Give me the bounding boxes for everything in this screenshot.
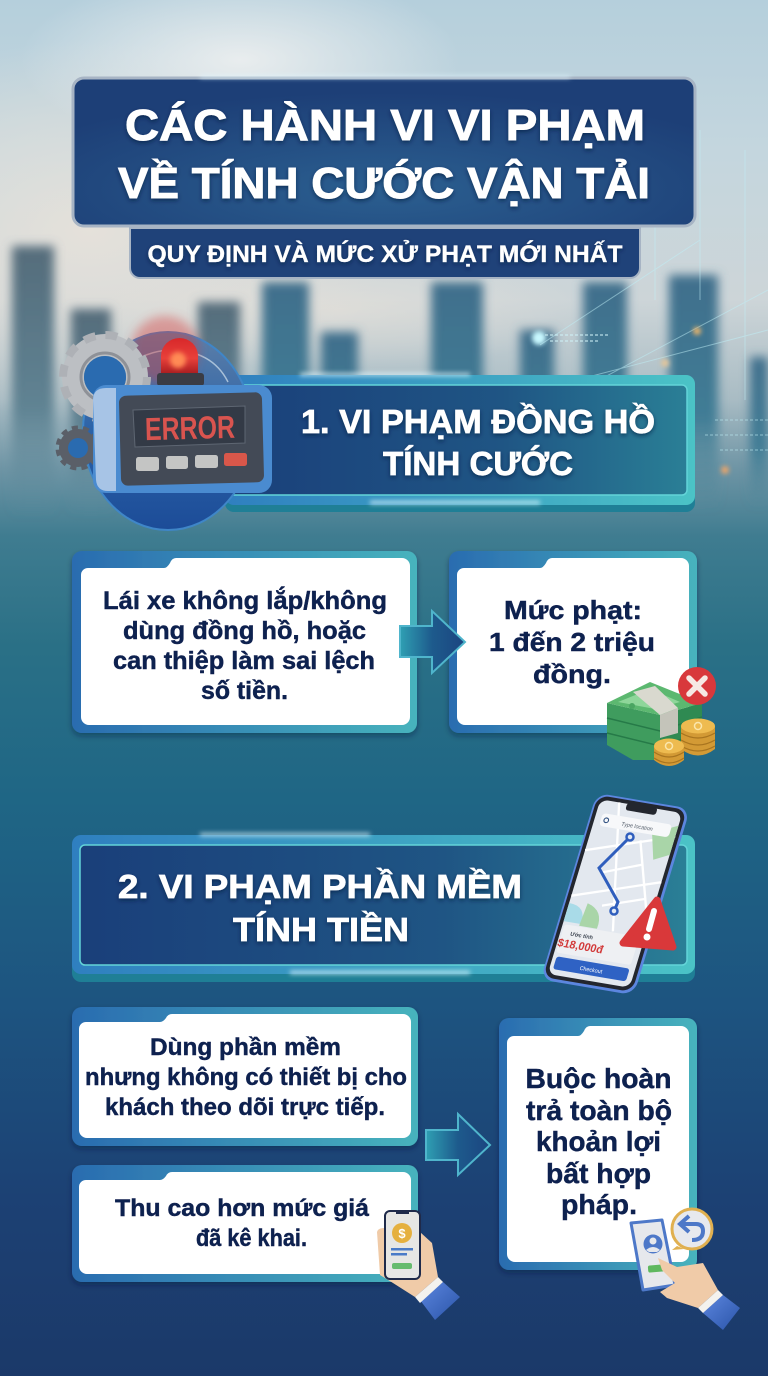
penalty text: Mức phạt: [504,595,642,625]
card text: Dùng phần mềm [150,1034,341,1061]
coin stack small [654,738,684,766]
confirm button [553,956,630,981]
icon: refund speech bubble [672,1209,712,1250]
price card [555,924,639,965]
search bar [599,813,672,837]
error text: ERROR [145,409,235,447]
penalty text: 1 đến 2 triệu [489,627,655,657]
title text: CÁC HÀNH VI VI PHẠM [125,100,645,150]
penalty text [489,595,655,689]
card text: nhưng không có thiết bị cho [85,1064,407,1091]
icon: hand holding phone with coin [377,1211,460,1320]
meter body [93,385,272,493]
icon: small gear [58,428,98,468]
confirm button: Checkout [579,966,603,976]
section 2 heading: 2. VI PHẠM PHẦN MỀM [118,868,522,905]
icon: hand tapping phone with refund bubble [631,1209,740,1330]
subtitle text: QUY ĐỊNH VÀ MỨC XỬ PHẠT MỚI NHẤT [148,239,623,268]
card: penalty [449,551,697,733]
card: refund remedy [499,1018,697,1270]
route line [599,837,630,911]
icon: large gear [63,335,147,419]
remedy text [526,1063,672,1220]
coin stack large [681,718,715,756]
icon: red cross badge [678,667,716,705]
icon: hand holding phone with coin: $ [398,1226,406,1241]
title panel [73,76,695,226]
card text: số tiền. [201,677,288,705]
remedy text: trả toàn bộ [526,1095,672,1126]
section 1 banner [225,373,695,512]
card: overcharging [72,1165,418,1282]
section 1 heading: TÍNH CƯỚC [383,445,573,482]
price card: Ước tính [569,932,594,941]
card text: Lái xe không lắp/không [103,585,387,615]
section 1 heading [301,403,655,482]
icon: warning triangle [623,900,673,947]
card text: khách theo dõi trực tiếp. [105,1094,385,1121]
arrow: violations to remedy [426,1114,490,1175]
icon: smartphone with map route [540,793,690,995]
title text [118,100,650,208]
section 2 heading [118,868,522,948]
icon: siren [157,338,204,386]
arrow: violation to penalty [400,611,465,673]
remedy text: khoản lợi [536,1126,661,1157]
penalty text: đồng. [533,659,611,689]
card: software without display [72,1007,418,1146]
card text: can thiệp làm sai lệch [113,647,375,675]
card: meter violation [72,551,417,733]
section 2 heading: TÍNH TIỀN [233,911,409,948]
card text: dùng đồng hồ, hoặc [123,617,366,645]
card text: Thu cao hơn mức giá [115,1195,370,1222]
card text: đã kê khai. [196,1225,307,1252]
remedy text: bất hợp [546,1158,651,1189]
card text [115,1195,370,1252]
section 2 banner [72,833,695,982]
remedy text: Buộc hoàn [526,1063,672,1094]
icon: money stack with coins and red cross [607,667,716,766]
remedy text: pháp. [561,1189,637,1220]
card text [85,1034,407,1121]
card text [103,585,387,705]
subtitle panel [130,228,640,278]
icon: error meter with siren and gears [58,316,272,530]
section 1 heading: 1. VI PHẠM ĐỒNG HỒ [301,403,655,440]
search bar: Type location [620,822,653,833]
title text: VỀ TÍNH CƯỚC VẬN TẢI [118,158,650,208]
price card: $18,000đ [556,937,605,956]
